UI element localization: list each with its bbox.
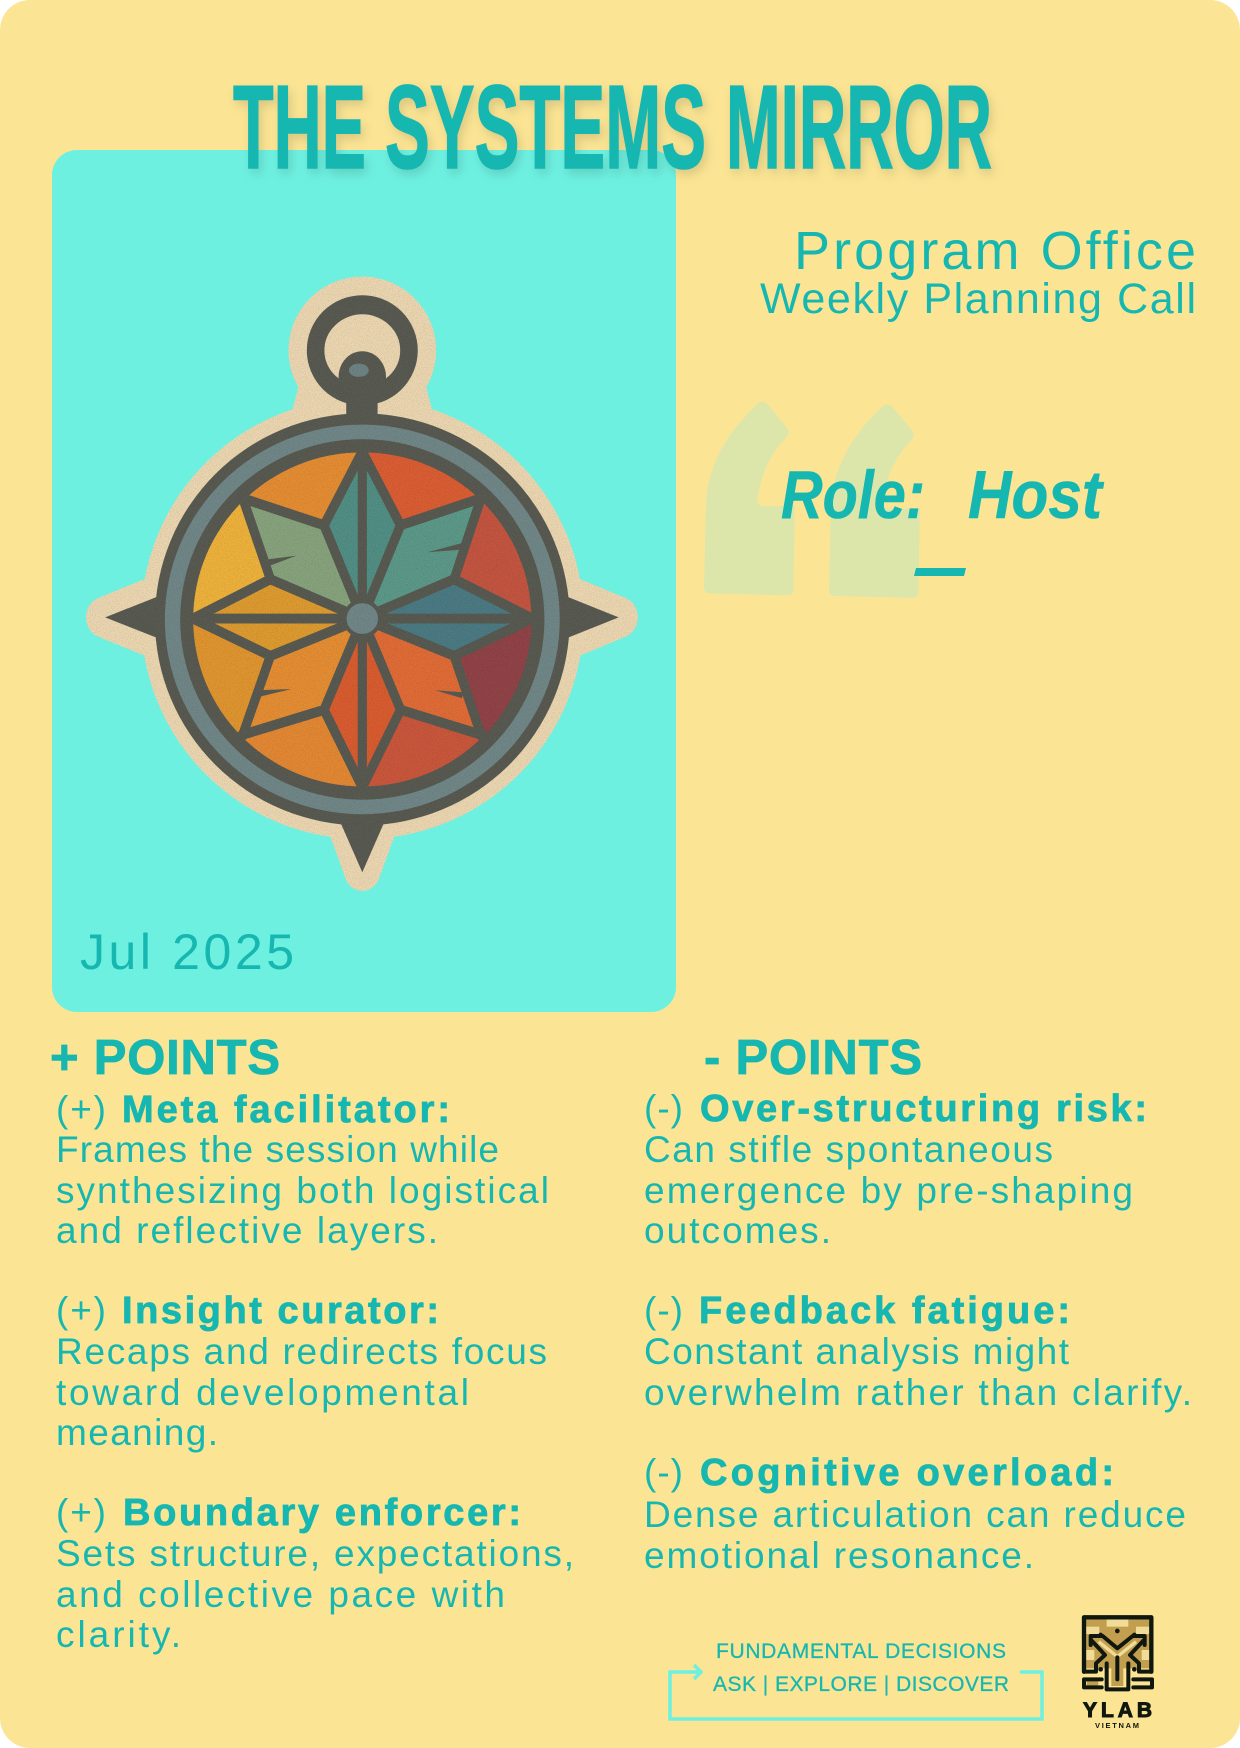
point: meta facilitator: (+) bbox=[56, 1089, 106, 1130]
icon: compass bbox=[86, 276, 638, 891]
point: feedback fatigue: overwhelm rather than clarify. bbox=[644, 1372, 1192, 1413]
point: feedback fatigue bbox=[644, 1290, 1192, 1413]
footer tagline: FUNDAMENTAL DECISIONS bbox=[716, 1640, 1006, 1663]
point: meta facilitator: Meta facilitator: bbox=[122, 1089, 450, 1131]
point: over-structuring risk: Over-structuring risk: bbox=[700, 1088, 1147, 1130]
date label: Jul 2025 bbox=[80, 924, 294, 980]
program heading bbox=[760, 221, 1196, 323]
point: meta facilitator: Frames the session while bbox=[56, 1129, 499, 1170]
panel: plus points bbox=[56, 1089, 574, 1655]
point: over-structuring risk: Can stifle spontaneous bbox=[644, 1129, 1053, 1170]
point: feedback fatigue: Feedback fatigue: bbox=[699, 1290, 1070, 1332]
compass pendant ring bbox=[316, 305, 409, 426]
point: over-structuring risk bbox=[644, 1088, 1147, 1251]
point: cognitive overload: (-) bbox=[644, 1452, 683, 1493]
point: over-structuring risk: outcomes. bbox=[644, 1210, 831, 1251]
point: insight curator: toward developmental bbox=[56, 1372, 469, 1413]
compass sticker outline bbox=[105, 284, 619, 871]
point: insight curator: meaning. bbox=[56, 1412, 218, 1453]
point: boundary enforcer: Sets structure, expectations, bbox=[56, 1533, 574, 1574]
call name: Weekly Planning Call bbox=[760, 275, 1196, 323]
heading: plus points: + POINTS bbox=[50, 1031, 280, 1085]
point: boundary enforcer: (+) bbox=[56, 1492, 106, 1533]
compass petal cracks bbox=[259, 543, 464, 698]
footer tagline bbox=[713, 1640, 1009, 1696]
point: insight curator bbox=[56, 1290, 547, 1453]
heading: minus points: - POINTS bbox=[704, 1031, 922, 1085]
point: boundary enforcer: clarity. bbox=[56, 1614, 181, 1655]
panel: minus points bbox=[644, 1088, 1192, 1576]
role statement: Host bbox=[968, 457, 1104, 533]
role statement: Role: bbox=[781, 457, 925, 533]
point: cognitive overload bbox=[644, 1452, 1186, 1576]
program name: Program Office bbox=[794, 221, 1196, 281]
logo subtitle: VIETNAM bbox=[1095, 1721, 1139, 1730]
point: cognitive overload: Cognitive overload: bbox=[700, 1452, 1114, 1494]
role statement bbox=[781, 457, 1104, 576]
point: insight curator: Insight curator: bbox=[122, 1290, 439, 1332]
point: boundary enforcer: and collective pace with bbox=[56, 1574, 505, 1615]
compass rose bbox=[193, 452, 532, 786]
compass hub bbox=[345, 601, 380, 636]
panel: compass image bbox=[52, 150, 676, 1012]
point: boundary enforcer bbox=[56, 1492, 574, 1655]
point: over-structuring risk: (-) bbox=[644, 1088, 683, 1129]
point: feedback fatigue: (-) bbox=[644, 1290, 683, 1331]
point: feedback fatigue: Constant analysis might bbox=[644, 1331, 1070, 1372]
logo: YLAB Vietnam bbox=[1083, 1617, 1152, 1730]
point: over-structuring risk: emergence by pre-shaping bbox=[644, 1170, 1133, 1211]
compass artwork bbox=[105, 284, 619, 872]
point: insight curator: Recaps and redirects focus bbox=[56, 1331, 547, 1372]
title: MIRROR bbox=[726, 61, 992, 194]
point: insight curator: (+) bbox=[56, 1290, 106, 1331]
icon: quotation mark bbox=[704, 402, 920, 598]
point: cognitive overload: Dense articulation can reduce bbox=[644, 1494, 1186, 1535]
point: meta facilitator: synthesizing both logistical bbox=[56, 1170, 549, 1211]
point: meta facilitator: and reflective layers. bbox=[56, 1210, 438, 1251]
logo wordmark: YLAB bbox=[1083, 1699, 1152, 1722]
point: cognitive overload: emotional resonance. bbox=[644, 1535, 1034, 1576]
footer tagline: ASK | EXPLORE | DISCOVER bbox=[713, 1673, 1009, 1696]
title: THE bbox=[233, 61, 366, 194]
point: boundary enforcer: Boundary enforcer: bbox=[123, 1492, 521, 1534]
point: meta facilitator bbox=[56, 1089, 549, 1251]
title: SYSTEMS bbox=[385, 61, 706, 194]
compass rim bbox=[155, 413, 570, 825]
arrow: loop frame bbox=[670, 1665, 1042, 1719]
logo mark bbox=[1082, 1615, 1154, 1692]
compass spikes bbox=[105, 597, 619, 872]
